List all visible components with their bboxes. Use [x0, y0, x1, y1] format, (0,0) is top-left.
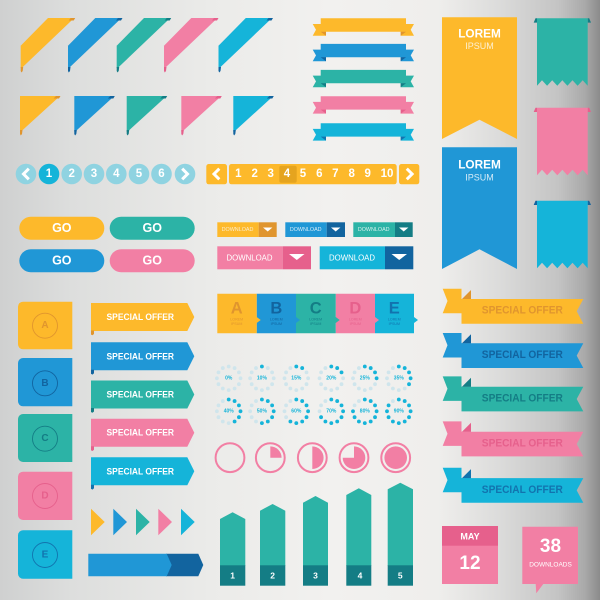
lettered step tabs: LOREM	[309, 317, 322, 321]
dotted progress rings: 60%	[291, 408, 302, 414]
yellow bookmark banner: IPSUM	[465, 41, 494, 51]
teal bar chart: 3	[313, 570, 318, 580]
GO buttons: GO	[52, 254, 72, 268]
downloads speech bubble	[522, 527, 578, 593]
hanging flags	[534, 18, 591, 268]
teal bar chart: 5	[398, 570, 403, 580]
downloads speech bubble: 38	[540, 536, 561, 557]
circular pagination: 4	[113, 168, 120, 180]
lettered cards A to E: D	[41, 490, 49, 502]
dotted progress rings: 70%	[326, 408, 337, 414]
special offer arrow tags	[91, 303, 194, 490]
teal bar chart: 4	[358, 570, 363, 580]
dotted progress rings: 35%	[394, 375, 404, 381]
dotted progress rings: 90%	[394, 408, 404, 414]
teal bar chart: 1	[230, 570, 235, 580]
header ribbons	[313, 18, 414, 141]
lettered cards A to E: C	[41, 433, 49, 444]
GO buttons: GO	[142, 221, 162, 235]
lettered step tabs: IPSUM	[310, 322, 321, 326]
circular pagination: 5	[136, 168, 143, 180]
corner ribbons: large row	[21, 18, 273, 72]
rectangular pagination: 2	[251, 168, 258, 180]
rectangular pagination: 8	[348, 168, 355, 180]
rectangular pagination: 6	[316, 168, 323, 180]
small download buttons: DOWNLOAD	[222, 227, 253, 233]
lettered step tabs: A	[231, 300, 243, 318]
yellow bookmark banner: LOREM	[458, 26, 501, 40]
calendar date tile: MAY	[460, 532, 480, 542]
dotted progress rings	[215, 365, 412, 425]
folded special offer ribbons: SPECIAL OFFER	[482, 305, 563, 317]
blue bookmark banner: LOREM	[458, 158, 501, 172]
GO buttons: GO	[52, 221, 72, 235]
rectangular pagination	[206, 164, 419, 184]
small triangle arrows	[91, 509, 195, 535]
lettered step tabs: C	[310, 300, 322, 318]
teal bar chart	[220, 483, 413, 586]
yellow bookmark banner	[442, 17, 517, 139]
dotted progress rings: 80%	[360, 408, 370, 414]
dotted progress rings: 20%	[326, 375, 337, 381]
lettered step tabs: E	[389, 300, 400, 318]
downloads speech bubble: DOWNLOADS	[529, 562, 572, 568]
rectangular pagination: 10	[381, 168, 393, 180]
pie progress circles	[216, 443, 410, 472]
large download buttons	[217, 246, 413, 269]
lettered cards A to E: A	[41, 320, 49, 331]
rectangular pagination: 5	[300, 168, 307, 180]
dotted progress rings: 25%	[360, 375, 370, 381]
circular pagination: 1	[46, 168, 53, 180]
dotted progress rings: 50%	[257, 408, 267, 414]
lettered cards A to E: B	[41, 378, 49, 389]
lettered cards A to E: E	[42, 550, 49, 560]
folded special offer ribbons: SPECIAL OFFER	[482, 349, 563, 361]
corner ribbons: small row	[20, 96, 274, 136]
rectangular pagination: 3	[267, 168, 274, 180]
GO buttons	[19, 217, 195, 272]
folded special offer ribbons: SPECIAL OFFER	[482, 484, 563, 496]
rectangular pagination: 4	[284, 168, 291, 180]
lettered step tabs: IPSUM	[271, 322, 282, 326]
circular pagination: 3	[91, 168, 97, 180]
special offer arrow tags: SPECIAL OFFER	[107, 390, 174, 400]
lettered step tabs: LOREM	[270, 317, 283, 321]
circular pagination: 6	[158, 168, 165, 180]
lettered step tabs: IPSUM	[350, 322, 361, 326]
blue bookmark banner: IPSUM	[465, 172, 494, 182]
dotted progress rings: 0%	[225, 375, 233, 381]
lettered step tabs: IPSUM	[231, 322, 242, 326]
large download buttons: DOWNLOAD	[329, 254, 375, 262]
blue bookmark banner	[442, 147, 517, 269]
small download buttons	[217, 222, 413, 237]
GO buttons: GO	[142, 254, 162, 268]
circular pagination: 2	[68, 168, 75, 180]
lettered step tabs: IPSUM	[389, 322, 400, 326]
lettered cards A to E	[18, 302, 72, 579]
lettered step tabs	[217, 294, 418, 333]
rectangular pagination: 1	[235, 168, 242, 180]
folded special offer ribbons: SPECIAL OFFER	[482, 392, 563, 404]
lettered step tabs: LOREM	[349, 317, 362, 321]
calendar date tile	[442, 526, 498, 584]
small download buttons: DOWNLOAD	[358, 227, 390, 233]
large download buttons: DOWNLOAD	[226, 254, 273, 262]
rectangular pagination: 7	[332, 168, 339, 180]
small download buttons: DOWNLOAD	[290, 227, 322, 233]
dotted progress rings: 10%	[257, 375, 267, 381]
lettered step tabs: D	[349, 300, 361, 318]
special offer arrow tags: SPECIAL OFFER	[107, 351, 174, 361]
special offer arrow tags: SPECIAL OFFER	[107, 428, 174, 438]
lettered step tabs: LOREM	[230, 317, 243, 321]
lettered step tabs: LOREM	[388, 317, 401, 321]
teal bar chart: 2	[270, 570, 275, 580]
folded special offer ribbons	[443, 289, 583, 503]
dotted progress rings: 15%	[291, 375, 302, 381]
folded special offer ribbons: SPECIAL OFFER	[482, 437, 563, 449]
special offer arrow tags: SPECIAL OFFER	[107, 466, 174, 476]
special offer arrow tags: SPECIAL OFFER	[107, 312, 174, 322]
circular pagination	[16, 164, 195, 184]
lettered step tabs: B	[270, 300, 282, 318]
rectangular pagination: 9	[364, 168, 371, 180]
dotted progress rings: 40%	[224, 408, 234, 414]
calendar date tile: 12	[459, 553, 481, 574]
two-tone arrow bar	[88, 554, 203, 576]
